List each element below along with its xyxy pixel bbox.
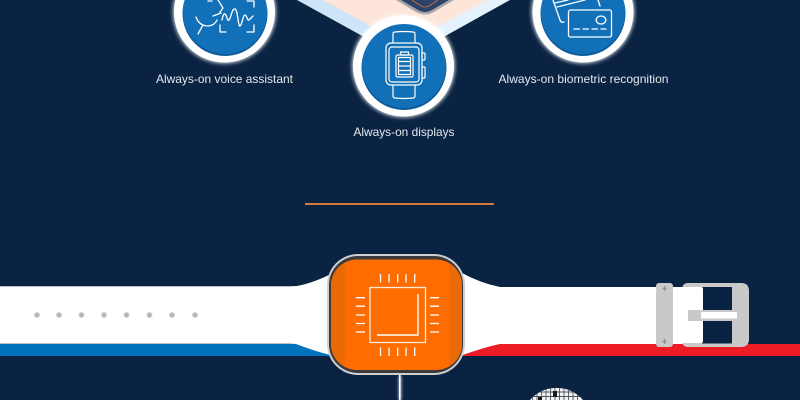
strap holes — [35, 313, 197, 317]
icon: processor chip — [356, 274, 439, 356]
watch case with chip — [327, 254, 465, 375]
watch strap: left — [0, 272, 335, 356]
icon: payment cards — [553, 0, 612, 37]
icon: smartwatch with battery — [386, 32, 425, 98]
diamond backdrop — [297, 0, 510, 59]
icon badge: displays — [352, 15, 454, 117]
strap keeper — [656, 283, 673, 347]
label: biometric recognition: Always-on biometric recognition — [498, 72, 668, 86]
buckle — [656, 283, 749, 347]
icon badge: biometric recognition — [532, 0, 634, 63]
case side shading — [331, 259, 463, 371]
connector line — [398, 375, 402, 400]
phone corner — [396, 0, 454, 14]
icon badge: voice assistant — [174, 0, 276, 63]
icon: face and sound wave — [196, 0, 254, 34]
divider line — [305, 203, 494, 205]
buckle tongue — [688, 310, 743, 321]
silicon wafer — [530, 388, 583, 400]
label: displays: Always-on displays — [354, 125, 454, 139]
label: voice assistant: Always-on voice assistant — [156, 72, 294, 86]
watch strap: right — [460, 272, 800, 356]
